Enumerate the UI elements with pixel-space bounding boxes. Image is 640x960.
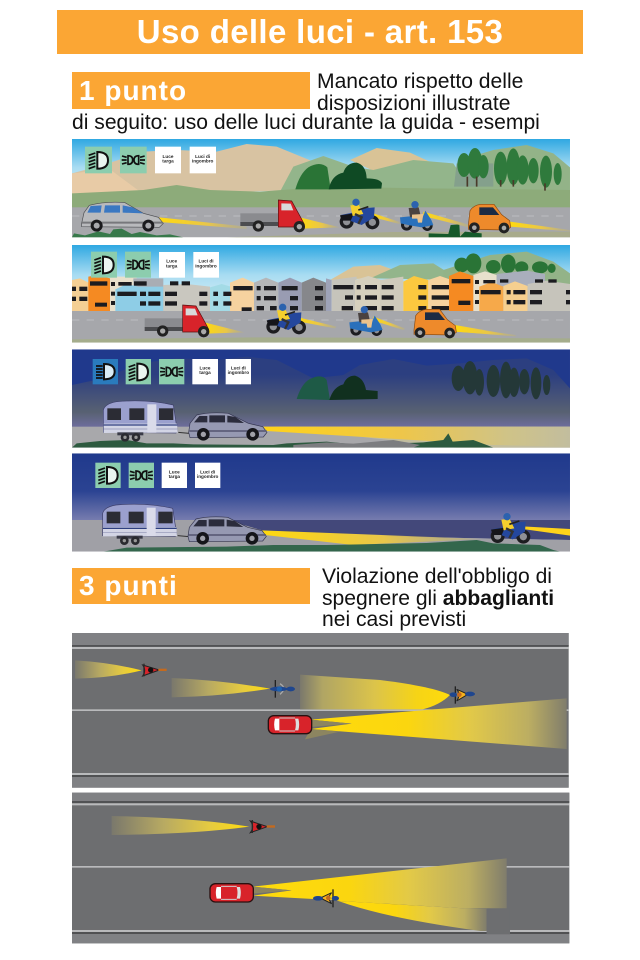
- text: 3 punti description: Violazione dell'obbligo di: [322, 565, 552, 588]
- lights icons, panel 3: targa: [199, 370, 211, 375]
- lights icons, panel 3: ingombro: [228, 370, 249, 375]
- lights icons, panel 1: [85, 147, 216, 173]
- panel: night countryside scene: [72, 349, 570, 448]
- beam: red motorcycle: [75, 660, 142, 679]
- panel: night seaside scene: [72, 453, 570, 552]
- caravan: [103, 504, 189, 545]
- badge: 1 punto: [72, 72, 310, 109]
- grey car: [189, 413, 267, 441]
- motorcycle: [340, 199, 379, 229]
- text: 3 punti description: nei casi previsti: [322, 608, 466, 631]
- beam: blue motorcycle: [172, 678, 270, 697]
- lights icons, panel 4: targa: [169, 474, 180, 479]
- trees: [454, 148, 562, 191]
- icon: red car: [268, 716, 312, 734]
- scooter: [400, 201, 433, 231]
- badge: 3 punti: 3 punti: [79, 570, 178, 601]
- motorcycle: [266, 304, 306, 334]
- lights icons, panel 2: ingombro: [195, 263, 217, 268]
- text: description continued: di seguito: uso delle luci durante la guida - esempi: [72, 111, 540, 134]
- text: 3 punti description: spegnere gli abbaglianti: [322, 586, 554, 610]
- lights icons, panel 1: ingombro: [192, 159, 214, 164]
- diagram: road from above, car behind motorcycle: [72, 793, 569, 943]
- icon: red motorcycle: [250, 820, 275, 833]
- lights icons, panel 2: Luce: [166, 259, 178, 264]
- grey car: [188, 517, 266, 545]
- text: 3 punti description: [322, 565, 554, 631]
- title banner: Uso delle luci - art. 153: [137, 13, 503, 50]
- lights icons, panel 4: ingombro: [197, 474, 219, 479]
- badge: 3 punti: [72, 568, 310, 604]
- lights icons, panel 4: Luce: [169, 469, 180, 474]
- text: 1 punto description: disposizioni illustrate: [317, 92, 510, 115]
- beam: red car, upper: [253, 858, 507, 908]
- beam: red motorcycle: [112, 816, 249, 835]
- text: 1 punto description: [317, 70, 523, 115]
- lights icons, panel 2: targa: [166, 263, 178, 268]
- icon: blue motorcycle: [270, 680, 295, 698]
- red three-wheeler: [145, 305, 244, 337]
- lights icons, panel 3: Luci di: [231, 365, 246, 370]
- lights icons, panel 3: Luce: [200, 365, 211, 370]
- lights icons, panel 2: [91, 252, 219, 278]
- badge: 1 punto: 1 punto: [79, 75, 187, 106]
- lights icons, panel 2: Luci di: [198, 259, 214, 264]
- orange microcar: [414, 309, 516, 338]
- panel: day countryside scene: [72, 139, 570, 237]
- title banner: [57, 10, 583, 54]
- beam: orange motorcycle: [300, 675, 450, 709]
- diagram: road from above, car overtaking motorcycles: [72, 633, 569, 788]
- windows: [72, 279, 570, 311]
- silver station wagon: [82, 202, 247, 232]
- icon: orange motorcycle: [450, 686, 475, 704]
- lights icons, panel 1: Luce: [163, 154, 174, 159]
- icon: orange motorcycle: [313, 889, 339, 907]
- panel: day town scene: [72, 245, 570, 343]
- text: 1 punto description: Mancato rispetto delle: [317, 70, 523, 93]
- illustrations: [72, 139, 570, 944]
- orange microcar: [468, 204, 570, 233]
- caravan: [103, 401, 189, 442]
- beam: red car: [311, 698, 567, 749]
- lights icons, panel 4: Luci di: [200, 469, 215, 474]
- motorcycle: [491, 513, 530, 544]
- red three-wheeler: [240, 200, 340, 232]
- lights icons, panel 4: [95, 463, 220, 488]
- buildings: [72, 271, 570, 312]
- icon: red motorcycle: [143, 664, 167, 676]
- lights icons, panel 1: targa: [162, 159, 174, 164]
- lights icons, panel 3: [93, 359, 251, 384]
- icon: red car: [210, 884, 253, 902]
- lights icons, panel 1: Luci di: [195, 154, 210, 159]
- scooter: [349, 306, 383, 336]
